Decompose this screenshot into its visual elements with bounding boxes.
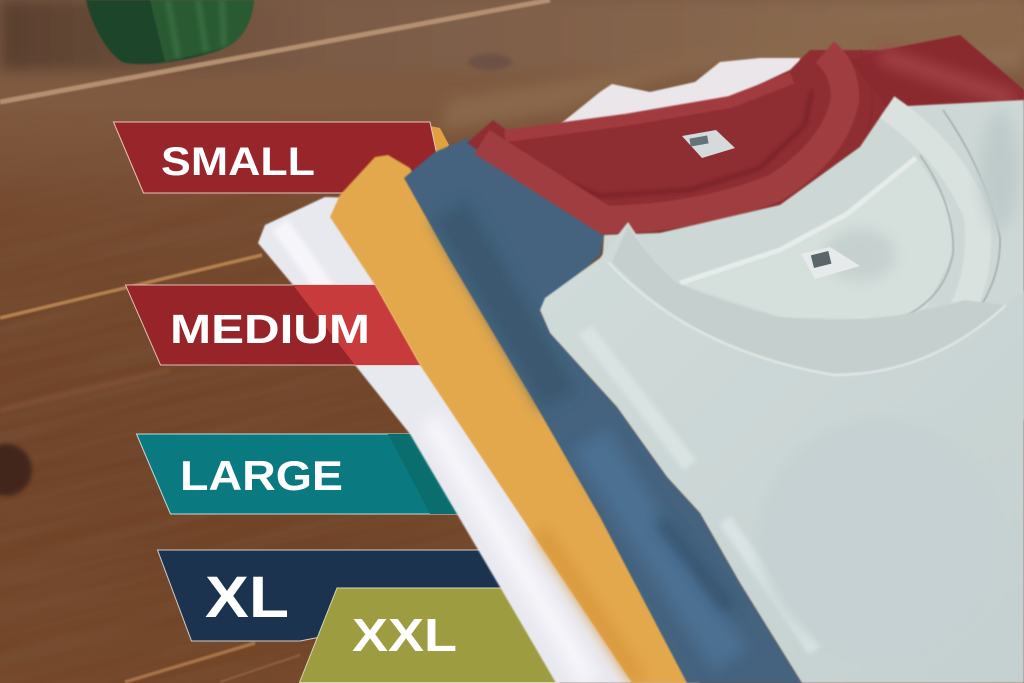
orange shirt sleeve peek (430, 126, 449, 160)
back shirt inner neck panel (680, 160, 953, 330)
label: large (136, 434, 459, 514)
back grey t-shirt (600, 100, 1024, 420)
label: xxl (300, 588, 559, 682)
white t-shirt (258, 197, 700, 683)
front grey t-shirt (540, 222, 1024, 683)
label: medium: MEDIUM (170, 306, 370, 352)
label: large: LARGE (180, 452, 343, 499)
label: small (114, 122, 438, 193)
label: xl (158, 550, 510, 641)
mustard t-shirt (330, 155, 700, 683)
maroon shirt tag (682, 130, 735, 158)
label: medium (126, 285, 420, 365)
maroon t-shirt (467, 35, 1024, 235)
grey shirt tag (801, 247, 860, 279)
blue t-shirt (404, 138, 802, 683)
label: xxl: XXL (352, 609, 457, 661)
label: xl: XL (205, 565, 289, 630)
green cactus pot (86, 0, 254, 64)
white shirt back collar (548, 58, 800, 134)
label: small: SMALL (161, 140, 315, 184)
